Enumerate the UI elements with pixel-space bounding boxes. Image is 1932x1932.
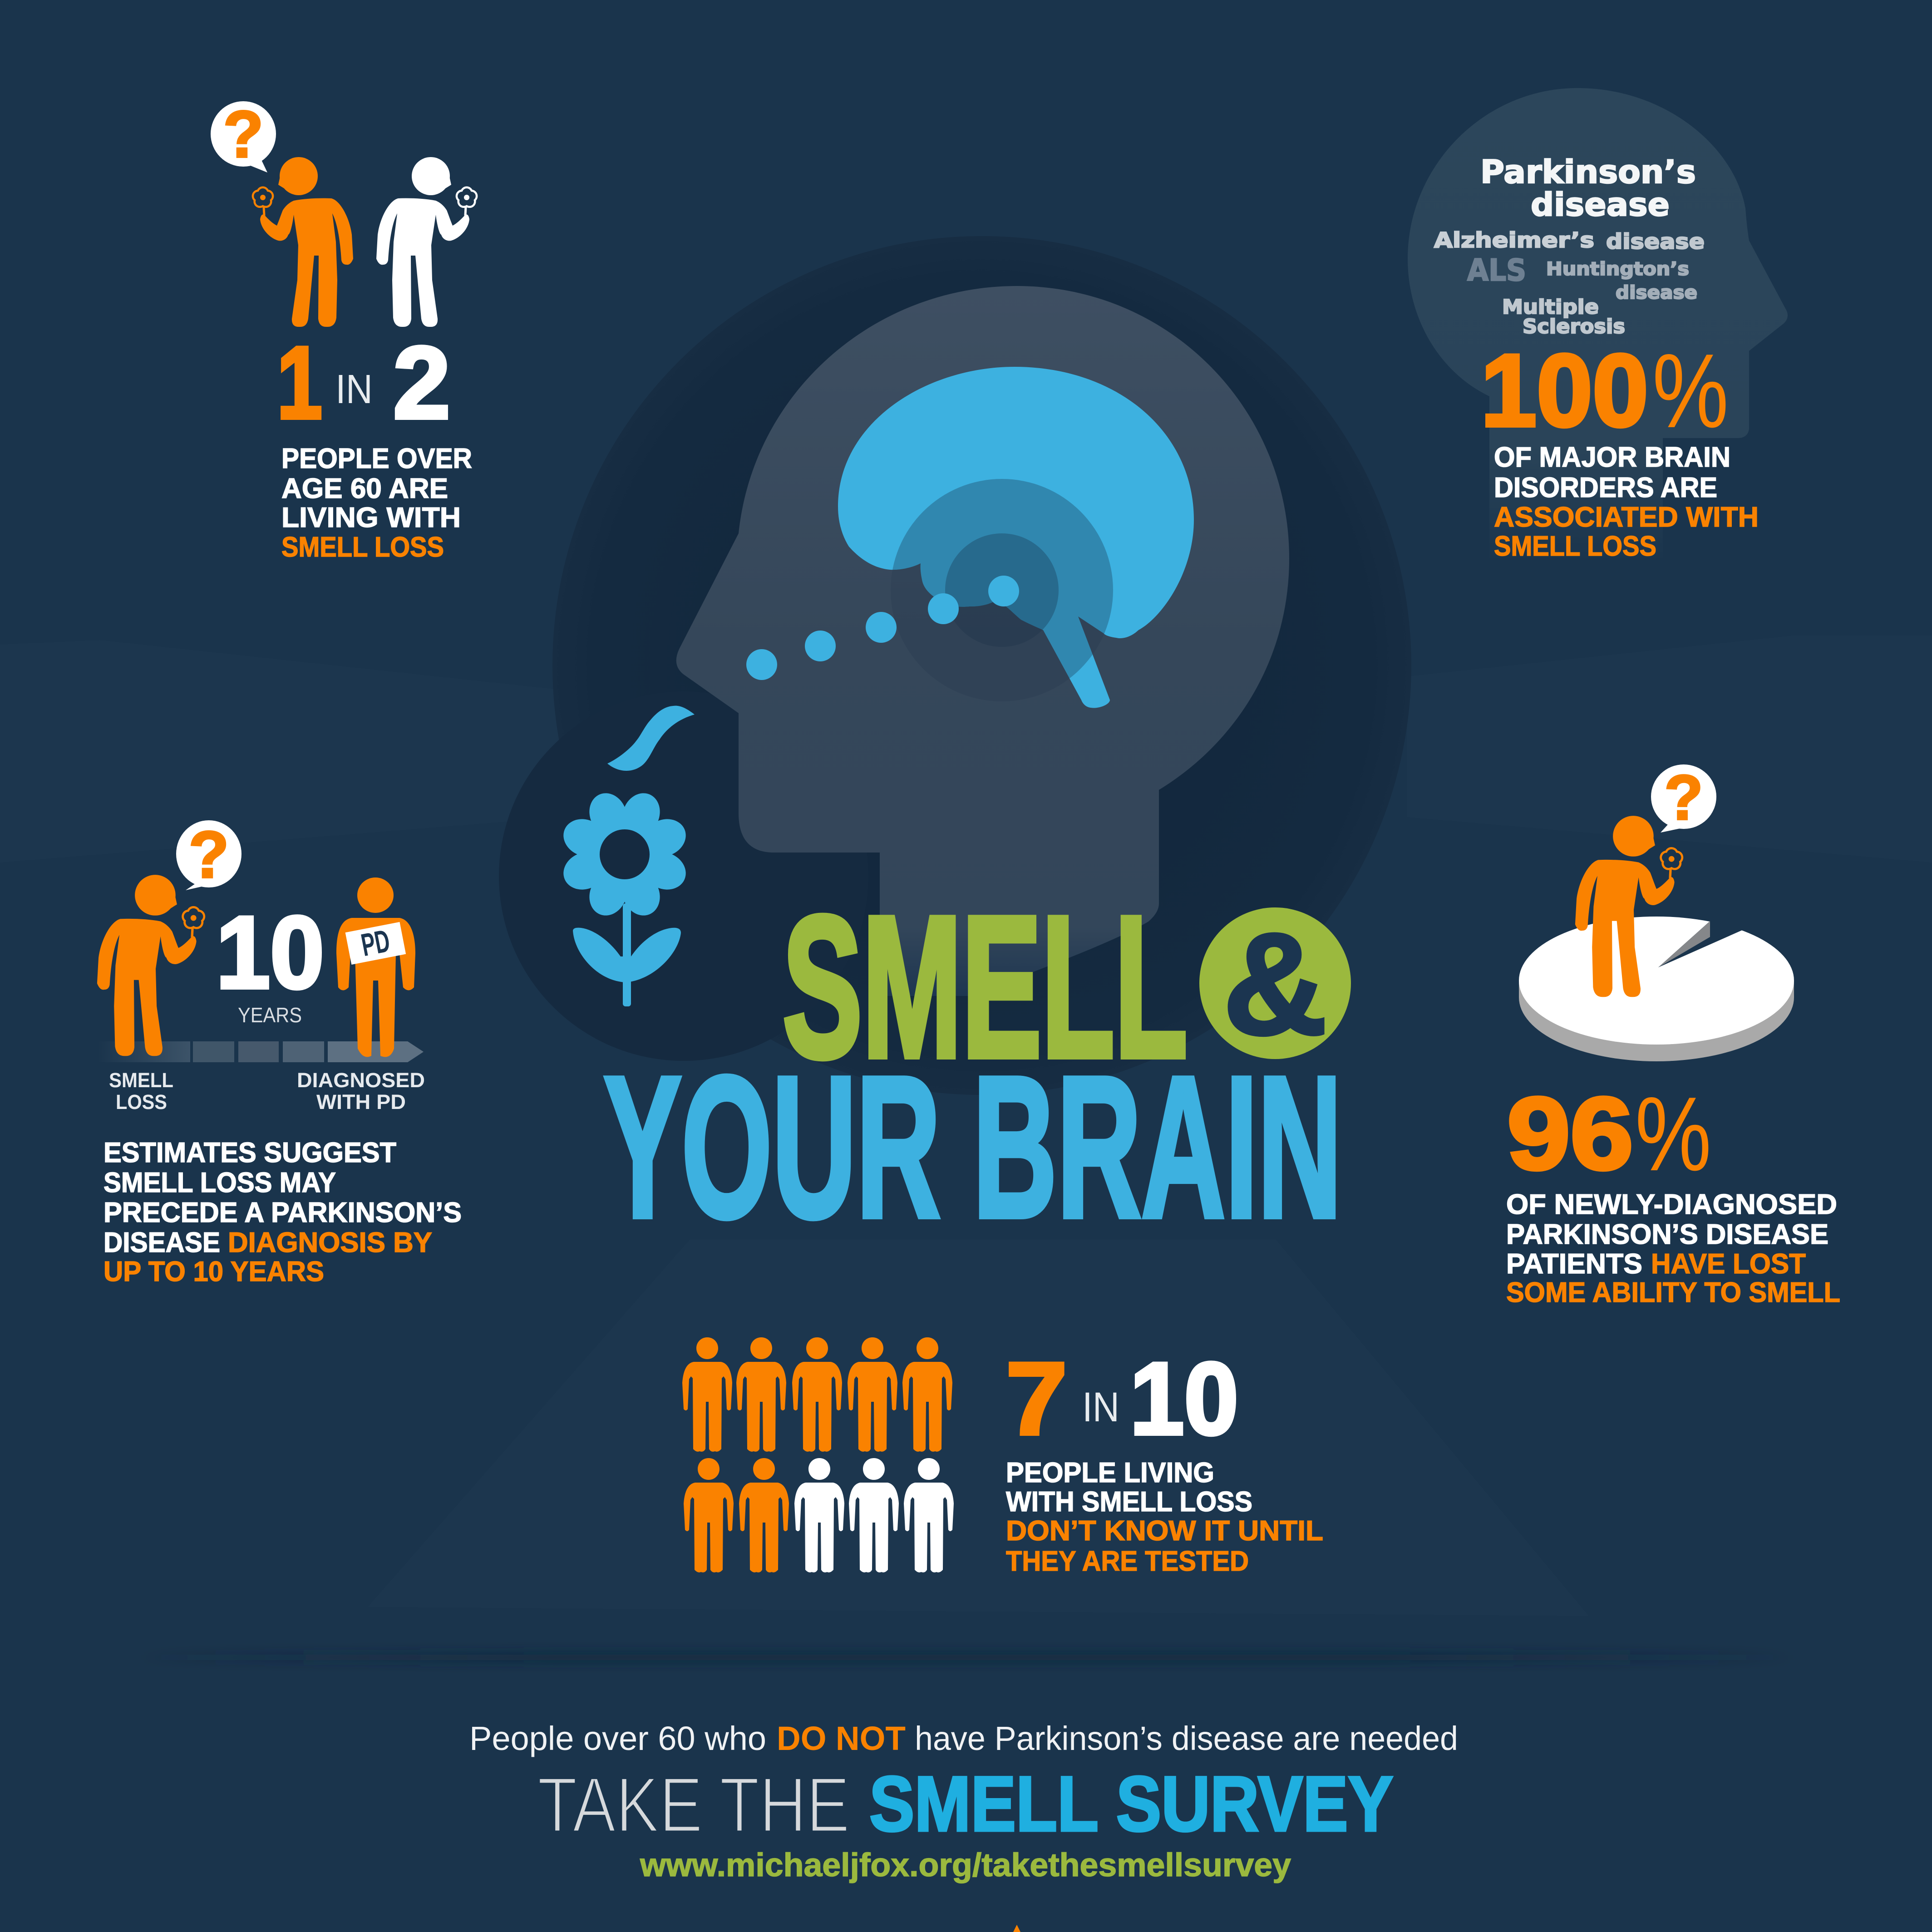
text block: DON’T KNOW IT UNTIL: [1006, 1515, 1323, 1547]
word cloud: disease: [1531, 186, 1670, 223]
word cloud: Alzheimer’s: [1434, 228, 1594, 252]
text block: PRECEDE A PARKINSON’S: [104, 1197, 462, 1228]
statistic: 100%: [1481, 332, 1729, 450]
intro line: People over 60 who: [469, 1720, 766, 1757]
icon: person smelling flower: [1575, 816, 1682, 997]
scent dots: [746, 576, 1019, 680]
heading: take the smell survey: TAKE THE: [537, 1761, 850, 1848]
text block: PATIENTS: [1506, 1248, 1642, 1280]
call to action: [469, 1720, 1458, 1932]
text block: SOME ABILITY TO SMELL: [1506, 1277, 1840, 1308]
text block: SMELL LOSS: [281, 532, 444, 563]
text block: DISORDERS ARE: [1494, 472, 1717, 503]
icon: person with PD sign: PD: [358, 923, 393, 963]
panel: 1 in 2: [211, 97, 477, 563]
panel: 96 percent: [1506, 762, 1840, 1308]
icon: question bubble: [1651, 762, 1716, 833]
ampersand badge: &: [1222, 902, 1328, 1065]
icon: question bubble: ?: [188, 818, 229, 892]
heading: take the smell survey: SMELL SURVEY: [869, 1760, 1393, 1848]
ampersand badge: [1199, 902, 1351, 1065]
text block: ASSOCIATED WITH: [1494, 502, 1759, 533]
statistic: 7 in 10: [1006, 1341, 1238, 1456]
brain inner rings: [892, 479, 1113, 678]
panel: 100 percent: [1408, 88, 1788, 563]
icon: person smelling flower: [97, 875, 204, 1056]
text block: UP TO 10 YEARS: [104, 1256, 324, 1287]
text block: OF MAJOR BRAIN: [1494, 442, 1730, 473]
intro line: [469, 1720, 1458, 1757]
icon: question bubble: ?: [223, 97, 264, 171]
title: your brain: YOUR BRAIN: [604, 1035, 1342, 1259]
text block: PEOPLE LIVING: [1006, 1457, 1214, 1488]
word cloud: Parkinson’s: [1480, 153, 1696, 191]
icon: question bubble: [176, 818, 242, 892]
intro line: have Parkinson’s disease are needed: [915, 1720, 1458, 1757]
text block: DIAGNOSIS BY: [228, 1227, 432, 1258]
text block: OF NEWLY-DIAGNOSED: [1506, 1189, 1837, 1220]
statistic: 96%: [1507, 1075, 1711, 1193]
text block: THEY ARE TESTED: [1006, 1546, 1249, 1577]
panel: 7 in 10: [682, 1337, 1323, 1577]
icon: grid of ten people: [682, 1337, 954, 1572]
statistic: 100%: %: [1652, 332, 1729, 450]
text block: HAVE LOST: [1651, 1248, 1806, 1280]
scent rings on head: [891, 479, 1113, 701]
central head with brain: [676, 286, 1289, 996]
timeline labels: WITH PD: [316, 1090, 406, 1114]
brain: [838, 367, 1194, 708]
text block: SMELL LOSS MAY: [104, 1167, 336, 1198]
statistic: 10 years: 10: [216, 895, 324, 1010]
statistic: 1 in 2: IN: [335, 367, 373, 412]
statistic: 1 in 2: 2: [393, 325, 450, 440]
icon: head with disease word cloud: [1408, 88, 1788, 563]
text block: [281, 443, 472, 563]
word cloud: ALS: [1467, 253, 1526, 288]
icon: question bubble: ?: [1664, 762, 1703, 833]
icon: scent wisp: [607, 706, 695, 771]
timeline labels: LOSS: [116, 1090, 167, 1114]
icon: question bubble: [211, 97, 276, 172]
word cloud: Sclerosis: [1523, 315, 1625, 338]
icon: white person smelling flower: [376, 157, 477, 327]
text block: [1006, 1457, 1323, 1577]
text block: [1506, 1189, 1840, 1308]
icon: orange person smelling flower: [253, 157, 353, 327]
text block: DISEASE: [104, 1227, 220, 1258]
statistic: 7 in 10: 7: [1006, 1341, 1067, 1456]
central dark head backdrop: [499, 236, 1411, 1095]
statistic: 1 in 2: 1: [277, 325, 322, 440]
icon: pie chart: [1519, 908, 1794, 1061]
statistic: 96%: 96: [1507, 1076, 1633, 1191]
logo fragment at edge: [1013, 1925, 1020, 1932]
text block: SMELL LOSS: [1494, 531, 1656, 562]
text block: [1494, 442, 1759, 562]
head silhouette: [676, 286, 1289, 996]
heading: take the smell survey: [537, 1760, 1393, 1848]
text block: AGE 60 ARE: [281, 473, 448, 504]
panel: 10 years: [97, 818, 462, 1287]
icon: person with PD sign: [336, 877, 415, 1057]
text block: ESTIMATES SUGGEST: [104, 1137, 396, 1168]
word cloud: Multiple: [1502, 296, 1599, 319]
text block: [104, 1137, 462, 1287]
word cloud: [1434, 153, 1705, 338]
icon: timeline arrow: [98, 1041, 424, 1062]
timeline labels: SMELL: [109, 1069, 173, 1092]
timeline labels: DIAGNOSED: [297, 1069, 425, 1092]
statistic: 7 in 10: IN: [1082, 1384, 1119, 1430]
url: www.michaeljfox.org/takethesmellsurvey: [640, 1847, 1291, 1883]
statistic: 7 in 10: 10: [1130, 1341, 1238, 1456]
statistic: 1 in 2: [277, 325, 450, 440]
word cloud: Huntington’s: [1546, 259, 1689, 280]
intro line: DO NOT: [777, 1720, 906, 1757]
word cloud: disease: [1616, 282, 1697, 303]
timeline labels: [109, 1069, 425, 1114]
title: [604, 874, 1351, 1259]
word cloud: disease: [1606, 229, 1705, 254]
text block: PARKINSON’S DISEASE: [1506, 1219, 1828, 1250]
icon: flower: [558, 788, 691, 1006]
statistic: 96%: %: [1635, 1075, 1711, 1193]
title: smell: SMELL: [783, 874, 1188, 1099]
statistic: 10 years: YEARS: [238, 1003, 302, 1027]
statistic: 100%: 100: [1481, 333, 1648, 448]
text block: WITH SMELL LOSS: [1006, 1486, 1252, 1518]
text block: LIVING WITH: [281, 502, 461, 533]
text block: PEOPLE OVER: [281, 443, 472, 474]
